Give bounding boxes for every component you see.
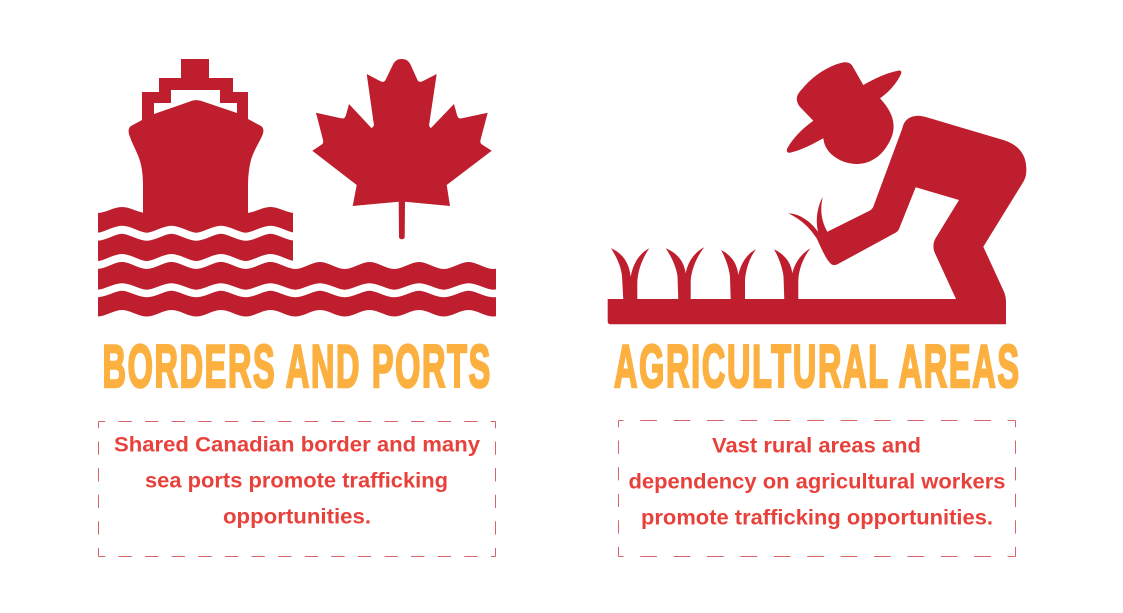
text: agricultural areas description: promote trafficking opportunities. (641, 506, 993, 530)
text: agricultural areas description: dependency on agricultural workers (628, 470, 1006, 494)
icon: farmer hat and head (787, 62, 901, 164)
text: borders and ports description: sea ports promote trafficking (145, 468, 448, 492)
icon: farmer body and ground (608, 116, 1026, 324)
text: agricultural areas description: Vast rural areas and (712, 434, 921, 458)
text: borders and ports description (114, 432, 480, 528)
icon: maple leaf (312, 59, 492, 239)
dashed box: agricultural areas (618, 420, 1016, 556)
panel: agricultural areas (608, 62, 1026, 556)
panel: borders and ports (98, 59, 496, 557)
text: borders and ports description: opportunities. (223, 504, 371, 528)
icon: grass tufts (611, 248, 649, 300)
text: agricultural areas description (628, 434, 1006, 530)
icon: ship on waves (98, 59, 496, 316)
icon: farmer bending over crops (608, 62, 1026, 324)
text: borders and ports description: Shared Canadian border and many (114, 432, 480, 456)
heading: borders and ports: BORDERS AND PORTS (102, 333, 490, 401)
dashed box: borders and ports (98, 422, 496, 556)
heading: agricultural areas: AGRICULTURAL AREAS (614, 333, 1019, 401)
